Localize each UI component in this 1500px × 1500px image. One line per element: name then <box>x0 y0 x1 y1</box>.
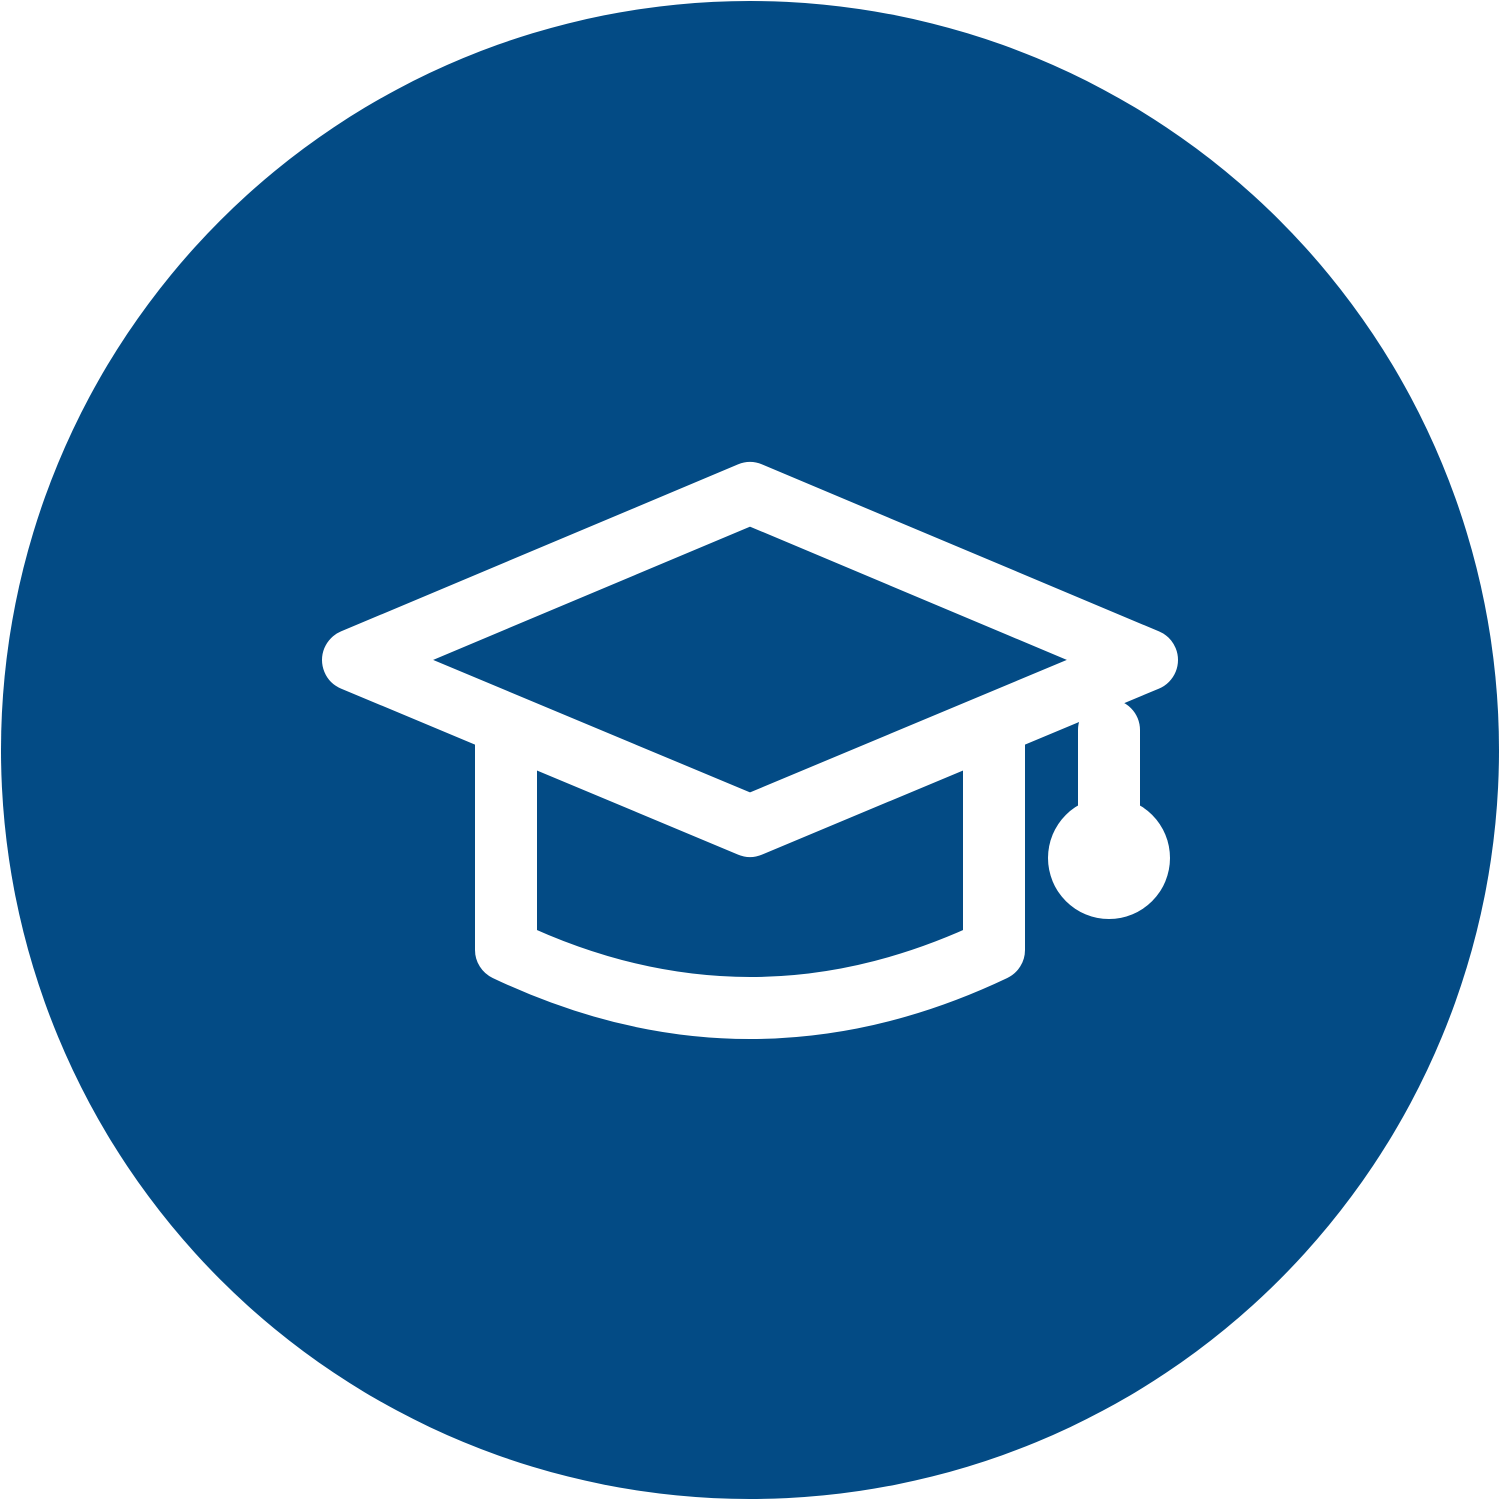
tassel cord <box>1078 730 1140 840</box>
cap body <box>506 735 994 1008</box>
tassel ball <box>1048 797 1170 919</box>
cap top diamond <box>353 493 1147 826</box>
icon: graduation cap <box>353 493 1147 1008</box>
